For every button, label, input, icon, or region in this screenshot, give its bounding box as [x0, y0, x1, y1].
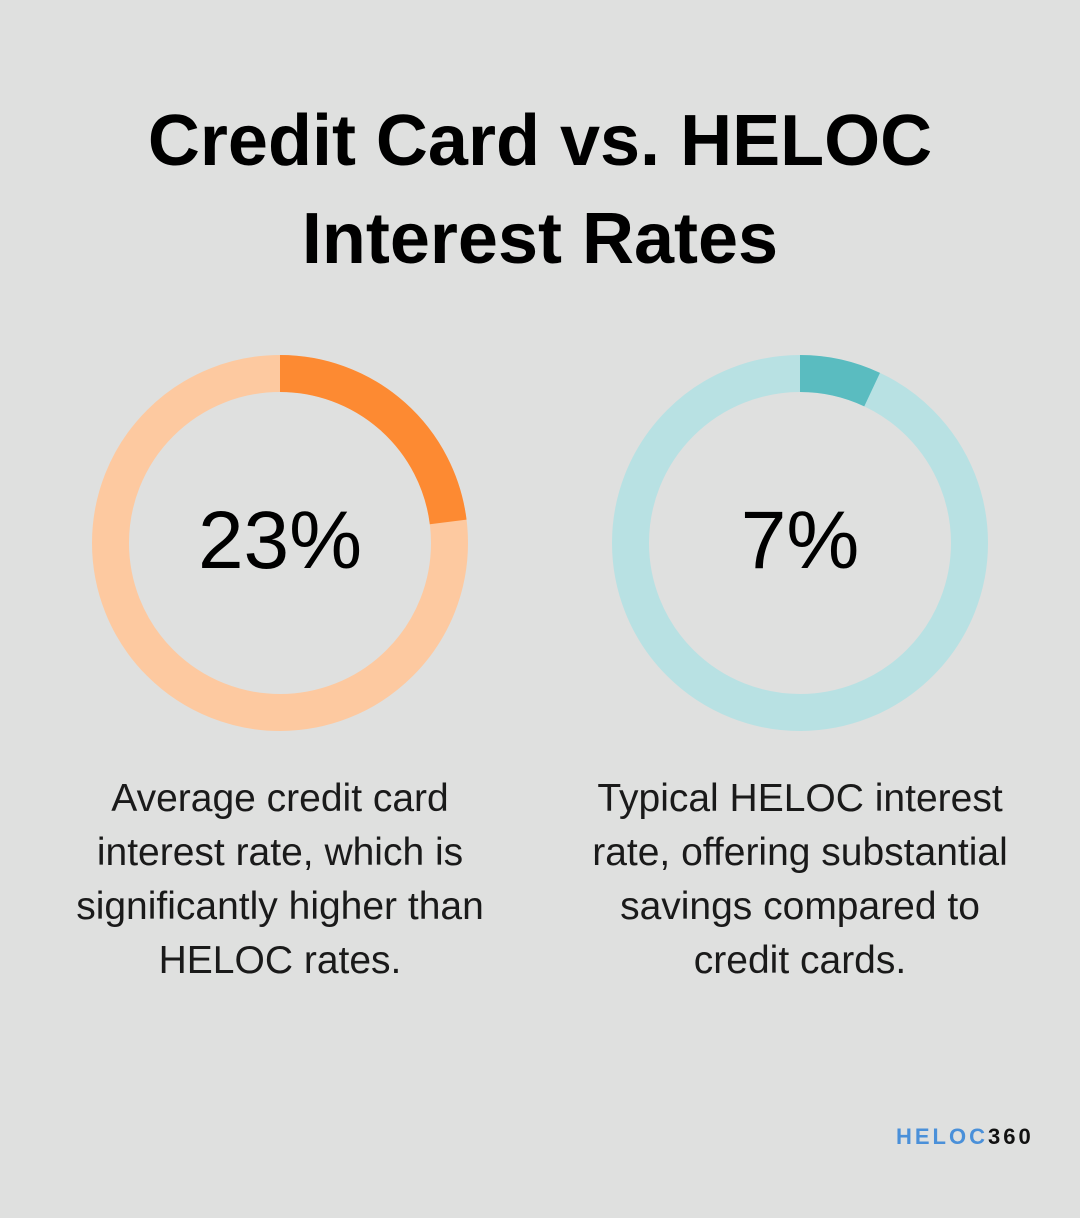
- text: HELOC description: credit cards.: [694, 939, 906, 982]
- text: HELOC description: [592, 777, 1008, 982]
- logo: HELOC360: [896, 1124, 1034, 1149]
- text: credit card description: significantly higher than: [76, 885, 484, 928]
- text: HELOC description: savings compared to: [620, 885, 980, 928]
- title: Credit Card vs. HELOC: [148, 101, 932, 181]
- text: HELOC description: rate, offering substantial: [592, 831, 1008, 874]
- title: Interest Rates: [302, 199, 778, 279]
- text: credit card description: HELOC rates.: [159, 939, 401, 982]
- donut: HELOC: 7%: [741, 495, 859, 586]
- text: credit card description: interest rate, which is: [97, 831, 463, 874]
- donut: credit card: [110, 374, 450, 712]
- donut: credit card: 23%: [198, 495, 362, 586]
- donut: HELOC: [630, 374, 970, 712]
- text: credit card description: Average credit card: [111, 777, 449, 820]
- title: [148, 101, 932, 279]
- text: HELOC description: Typical HELOC interest: [597, 777, 1003, 820]
- text: credit card description: [76, 777, 484, 982]
